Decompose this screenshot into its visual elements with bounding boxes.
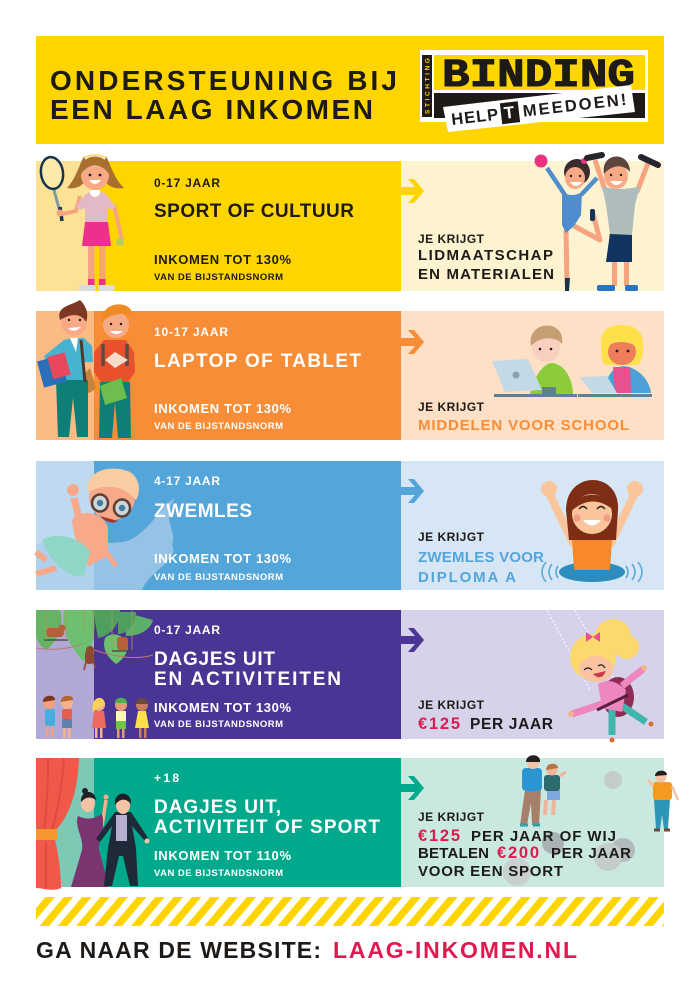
striped divider (36, 897, 664, 926)
heading: SPORT OF CULTUUR (154, 201, 354, 222)
benefit text: €200 (497, 844, 539, 862)
benefit text (418, 810, 631, 880)
income condition: VAN DE BIJSTANDSNORM (154, 572, 283, 583)
arrow (401, 776, 424, 800)
icon: jungle leaves with monkeys (36, 610, 153, 670)
website call to action: GA NAAR DE WEBSITE: (36, 937, 321, 963)
income condition (154, 401, 291, 432)
benefit text: PER JAAR (470, 716, 553, 733)
benefit text (418, 400, 629, 434)
benefit text: MIDDELEN VOOR SCHOOL (418, 417, 629, 434)
heading: DAGJES UIT, (154, 797, 281, 818)
icon: gymnast and boy with dumbbells (534, 154, 658, 291)
panel: dagjes uit en activiteiten (36, 610, 664, 742)
panel: dagjes uit, activiteit of sport (36, 755, 678, 890)
benefit text: €125 (418, 715, 460, 733)
income condition: INKOMEN TOT 130% (154, 551, 291, 566)
logo: Stichting Binding: MEEDOEN! (522, 91, 627, 121)
income condition: INKOMEN TOT 130% (154, 700, 291, 715)
icon: swimming boy with goggles (36, 469, 139, 577)
website call to action: LAAG-INKOMEN.NL (333, 937, 577, 963)
benefit text: DIPLOMA A (418, 569, 516, 586)
icon: children with laptop and tablet (492, 325, 652, 397)
benefit text: PER JAAR (551, 845, 631, 862)
icon: singer and man in tuxedo (71, 788, 150, 887)
heading (154, 797, 380, 838)
benefit text (418, 698, 553, 733)
benefit text: JE KRIJGT (418, 698, 485, 712)
title: ONDERSTEUNING BIJ (50, 65, 397, 96)
income condition: INKOMEN TOT 130% (154, 401, 291, 416)
age: 0-17 JAAR (154, 176, 220, 190)
income condition (154, 252, 291, 283)
benefit text: EN MATERIALEN (418, 266, 554, 283)
benefit text: PER JAAR OF WIJ (471, 828, 616, 845)
benefit text: LIDMAATSCHAP (418, 247, 553, 264)
benefit text: JE KRIJGT (418, 232, 485, 246)
icon: group of children (43, 696, 149, 738)
income condition: VAN DE BIJSTANDSNORM (154, 421, 283, 432)
income condition: INKOMEN TOT 110% (154, 848, 291, 863)
icon: girl on a zip line (547, 610, 654, 742)
income condition (154, 551, 291, 583)
income condition (154, 700, 291, 730)
panel: laptop of tablet (36, 300, 664, 440)
logo: Stichting Binding: T (503, 103, 516, 123)
arrow (401, 330, 424, 354)
icon: people playing jeu de boules (503, 755, 678, 886)
age: 0-17 JAAR (154, 623, 220, 637)
heading: LAPTOP OF TABLET (154, 351, 361, 372)
heading: EN ACTIVITEITEN (154, 669, 341, 690)
logo: Stichting Binding (420, 50, 648, 132)
benefit text: JE KRIJGT (418, 530, 485, 544)
heading: ZWEMLES (154, 501, 252, 522)
logo: Stichting Binding: STICHTING (424, 58, 432, 114)
icon: two school boys (37, 300, 135, 438)
panel: sport of cultuur (36, 154, 664, 291)
income condition: VAN DE BIJSTANDSNORM (154, 719, 283, 730)
arrow (401, 179, 424, 203)
benefit text: JE KRIJGT (418, 400, 485, 414)
income condition: VAN DE BIJSTANDSNORM (154, 272, 283, 283)
logo: Stichting Binding: HELP (450, 106, 499, 129)
benefit text: €125 (418, 827, 460, 845)
benefit text (418, 232, 554, 283)
benefit text: VOOR EEN SPORT (418, 863, 563, 880)
heading: DAGJES UIT (154, 649, 275, 670)
panel: zwemles (36, 461, 664, 590)
income condition: VAN DE BIJSTANDSNORM (154, 868, 283, 879)
age: 4-17 JAAR (154, 474, 220, 488)
icon: splash (36, 498, 175, 590)
logo: Stichting Binding: BINDING (442, 54, 635, 99)
income condition: INKOMEN TOT 130% (154, 252, 291, 267)
benefit text: ZWEMLES VOOR (418, 549, 544, 566)
icon: girl with tennis racket (39, 155, 124, 291)
website call to action (36, 937, 577, 963)
arrow (401, 479, 424, 503)
title (50, 65, 397, 125)
benefit text: JE KRIJGT (418, 810, 485, 824)
age: +18 (154, 771, 179, 785)
heading (154, 649, 341, 690)
arrow (401, 628, 424, 652)
benefit text: BETALEN (418, 845, 489, 862)
heading: ACTIVITEIT OF SPORT (154, 817, 380, 838)
benefit text (418, 530, 544, 586)
income condition (154, 848, 291, 879)
header banner (36, 36, 664, 144)
age: 10-17 JAAR (154, 325, 228, 339)
icon: woman waving in water (541, 480, 643, 582)
title: EEN LAAG INKOMEN (50, 94, 373, 125)
icon: stage curtain (36, 758, 79, 890)
